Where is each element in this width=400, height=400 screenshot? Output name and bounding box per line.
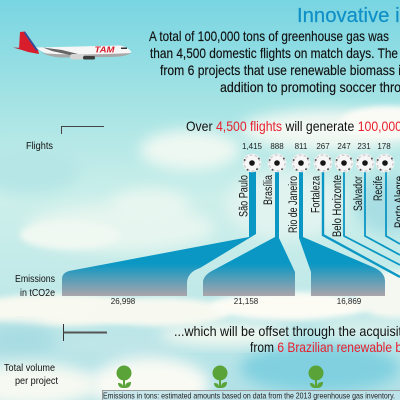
flight counts: 1,415 — [242, 142, 263, 151]
soccer balls — [243, 154, 394, 172]
label: emissions — [15, 273, 55, 299]
label: flights: Flights — [26, 141, 53, 152]
emission values — [111, 297, 362, 306]
city labels: Salvador — [353, 176, 365, 211]
airplane: TAM — [94, 46, 115, 54]
city labels: São Paulo — [238, 175, 250, 217]
label: total volume per project: per project — [15, 375, 58, 387]
city labels: Rio de Janeiro — [288, 176, 300, 233]
flight counts: 888 — [270, 142, 284, 151]
flows: smaller host cities — [323, 170, 400, 277]
flow: Rio de Janeiro emissions — [299, 170, 385, 296]
label: emissions: in tCO2e — [20, 287, 55, 299]
label: total volume per project: Total volume — [4, 362, 55, 374]
flight counts: 231 — [357, 142, 371, 151]
airplane — [13, 32, 132, 60]
city labels — [238, 175, 400, 237]
heading: offset — [174, 323, 400, 355]
emission values: 21,158 — [234, 297, 259, 306]
flight counts: 811 — [295, 142, 308, 151]
flight counts — [242, 142, 391, 151]
plant icons — [116, 366, 324, 388]
emission values: 16,869 — [337, 297, 362, 306]
flow: Brasília emissions — [203, 170, 295, 296]
intro paragraph — [149, 28, 400, 95]
flight counts: 247 — [337, 142, 351, 151]
flight counts: 178 — [377, 142, 391, 151]
emission values: 26,998 — [111, 297, 136, 306]
city labels: Brasília — [263, 175, 275, 205]
label: emissions: Emissions — [15, 273, 55, 285]
flight counts: 267 — [316, 142, 330, 151]
flow: São Paulo emissions — [62, 170, 256, 296]
city labels: Fortaleza — [310, 176, 322, 213]
label: total volume per project — [4, 362, 58, 387]
bracket: flights — [62, 126, 104, 134]
city labels: Recife — [373, 176, 385, 201]
city labels: Belo Horizonte — [332, 175, 344, 237]
bracket: total volume — [64, 324, 107, 341]
